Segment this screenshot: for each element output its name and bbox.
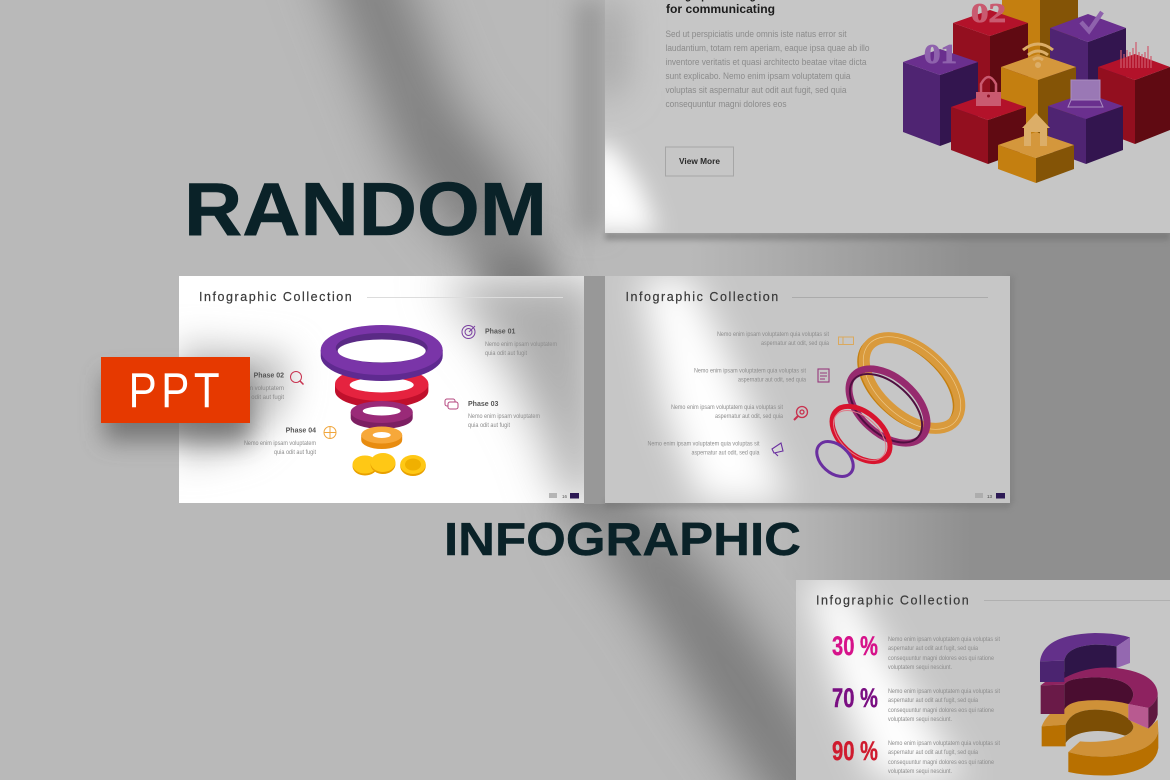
segment: orange [1042, 699, 1158, 776]
stat: 30%: consequuntur magni dolores eos qui ratione [888, 656, 995, 662]
phase 04 [244, 428, 316, 456]
stat: 70%: aspernatur aut odit aut fugit, sed quia [888, 698, 979, 704]
stat: 70%: Nemo enim ipsam voluptatem quia voluptas sit [888, 689, 1000, 695]
ring: magenta [351, 401, 413, 429]
phase 02: Phase 02 [254, 372, 284, 380]
icon: check [1081, 12, 1102, 31]
text block: body [666, 29, 870, 109]
icon: chat [445, 399, 458, 409]
panel: top right slide with cubes [585, 0, 1170, 233]
stat: 70%: consequuntur magni dolores eos qui ratione [888, 708, 995, 714]
icon: megaphone [772, 443, 783, 456]
chart: isometric cubes [903, 0, 1170, 183]
phase 01: Nemo enim ipsam voluptatem [485, 342, 557, 348]
text: item 2: aspernatur aut odit, sed quia [738, 378, 807, 384]
phase 02: Nemo enim ipsam voluptatem [205, 386, 284, 392]
heading: RANDOM: RANDOM [184, 167, 547, 251]
icon: lock [976, 77, 1001, 106]
stat: 70% [832, 683, 1000, 723]
cube: red 02 [953, 10, 1028, 92]
chart: tilted rings [810, 318, 978, 483]
phase 03 [468, 401, 540, 429]
segment: purple [1040, 633, 1130, 682]
text block: body: Sed ut perspiciatis unde omnis iste natus error sit [666, 29, 847, 39]
text block: heading: for communicating [666, 2, 775, 16]
ring: red [335, 367, 428, 408]
phase 03: Nemo enim ipsam voluptatem [468, 414, 540, 420]
phase 04: Phase 04 [286, 428, 316, 434]
badge: PPT: PPT [129, 363, 220, 418]
segment: magenta [1041, 666, 1158, 729]
phase 01: quia odit aut fugit [485, 351, 527, 357]
heading: Infographic Collection [199, 290, 353, 304]
text: item 3: aspernatur aut odit, sed quia [715, 414, 784, 420]
text: item 3 [671, 405, 784, 420]
stat: 90%: aspernatur aut odit aut fugit, sed quia [888, 750, 979, 756]
cube: purple 01 [903, 49, 978, 146]
phase 01: Phase 01 [485, 328, 515, 336]
stat: 30%: Nemo enim ipsam voluptatem quia voluptas sit [888, 637, 1000, 643]
text: item 1 [717, 332, 830, 347]
stat: 70%: voluptatem sequi nesciunt. [888, 717, 952, 723]
cube: orange home [998, 132, 1074, 183]
stat: 30%: aspernatur aut odit aut fugit, sed quia [888, 646, 979, 652]
ring: purple [810, 435, 860, 483]
ring: orange [844, 318, 978, 449]
footer nav: 16 [562, 494, 568, 499]
text block: body: inventore veritatis et quasi architecto beatae vitae dicta [666, 57, 866, 67]
phase 03: Phase 03 [468, 401, 498, 408]
icon: globe [324, 426, 336, 438]
icon: laptop [1068, 80, 1103, 107]
heading: INFOGRAPHIC: INFOGRAPHIC [444, 513, 801, 565]
phase 04: Nemo enim ipsam voluptatem [244, 441, 316, 447]
heading: Infographic Collection [626, 290, 780, 304]
icon: ticket [838, 337, 854, 344]
text: item 1: aspernatur aut odit, sed quia [761, 341, 830, 347]
cube: purple check [1050, 14, 1126, 120]
stat: 90% [832, 736, 1000, 775]
cube: red lock [951, 94, 1026, 164]
cube: red right [1098, 54, 1170, 144]
phase 01 [485, 328, 557, 357]
text: item 3: Nemo enim ipsam voluptatem quia voluptas sit [671, 405, 783, 411]
ring: orange [361, 426, 402, 449]
text: item 2: Nemo enim ipsam voluptatem quia voluptas sit [694, 368, 806, 374]
phase 02 [205, 372, 284, 401]
cube: back tall orange [1002, 0, 1078, 80]
panel: tilted rings slide [605, 276, 1010, 503]
text: item 4: Nemo enim ipsam voluptatem quia voluptas sit [648, 442, 760, 448]
button: View More: View More [679, 157, 721, 166]
stat: 30%: 30 % [832, 631, 878, 661]
text block: body: voluptas sit aspernatur aut odit aut fugit, sed quia [666, 85, 846, 95]
stat: 70%: 70 % [832, 683, 878, 713]
footer nav [975, 493, 1005, 499]
icon: magnifier chart [290, 372, 304, 384]
chart: stacked 3D ring segments [1040, 633, 1158, 776]
stat: 90%: 90 % [832, 736, 878, 766]
icon: bars [1121, 42, 1151, 68]
heading: Infographic Collection [816, 594, 970, 608]
button: View More [666, 147, 734, 176]
text block: body: laudantium, totam rem aperiam, eaque ipsa quae ab illo [666, 43, 870, 53]
stat: 90%: consequuntur magni dolores eos qui ratione [888, 760, 995, 766]
text: item 1: Nemo enim ipsam voluptatem quia voluptas sit [717, 332, 829, 338]
stat: 30%: voluptatem sequi nesciunt. [888, 665, 952, 671]
text: item 4 [648, 442, 760, 456]
phase 02: quia odit aut fugit [238, 395, 284, 401]
ring: magenta [835, 354, 941, 458]
text block: body: sunt explicabo. Nemo enim ipsam voluptatem quia [666, 71, 850, 81]
cube: purple laptop [1048, 93, 1123, 164]
panel: percentages slide [796, 580, 1170, 780]
coins [352, 453, 426, 476]
phase 03: quia odit aut fugit [468, 423, 510, 429]
ring: red [822, 396, 900, 472]
number: 01: 01 [924, 39, 957, 69]
icon: target [462, 326, 475, 338]
text: item 2 [694, 368, 807, 384]
icon: magnifier [794, 406, 808, 420]
icon: document [818, 369, 829, 382]
icon: home [1022, 113, 1050, 146]
footer nav [549, 493, 579, 499]
cube: orange wifi [1001, 54, 1076, 140]
text: item 4: aspernatur aut odit, sed quia [692, 450, 760, 456]
text block: body: consequuntur magni dolores eos [666, 99, 787, 109]
phase 04: quia odit aut fugit [274, 450, 316, 456]
stat: 90%: Nemo enim ipsam voluptatem quia voluptas sit [888, 741, 1000, 747]
icon: wifi [1023, 44, 1053, 66]
badge: PPT [101, 357, 250, 441]
stat: 90%: voluptatem sequi nesciunt. [888, 769, 952, 775]
footer nav: 13 [987, 494, 993, 499]
stat: 30% [832, 631, 1000, 671]
panel: funnel slide [179, 276, 600, 503]
ring: purple [321, 325, 443, 381]
chart: funnel of rings [321, 325, 443, 476]
